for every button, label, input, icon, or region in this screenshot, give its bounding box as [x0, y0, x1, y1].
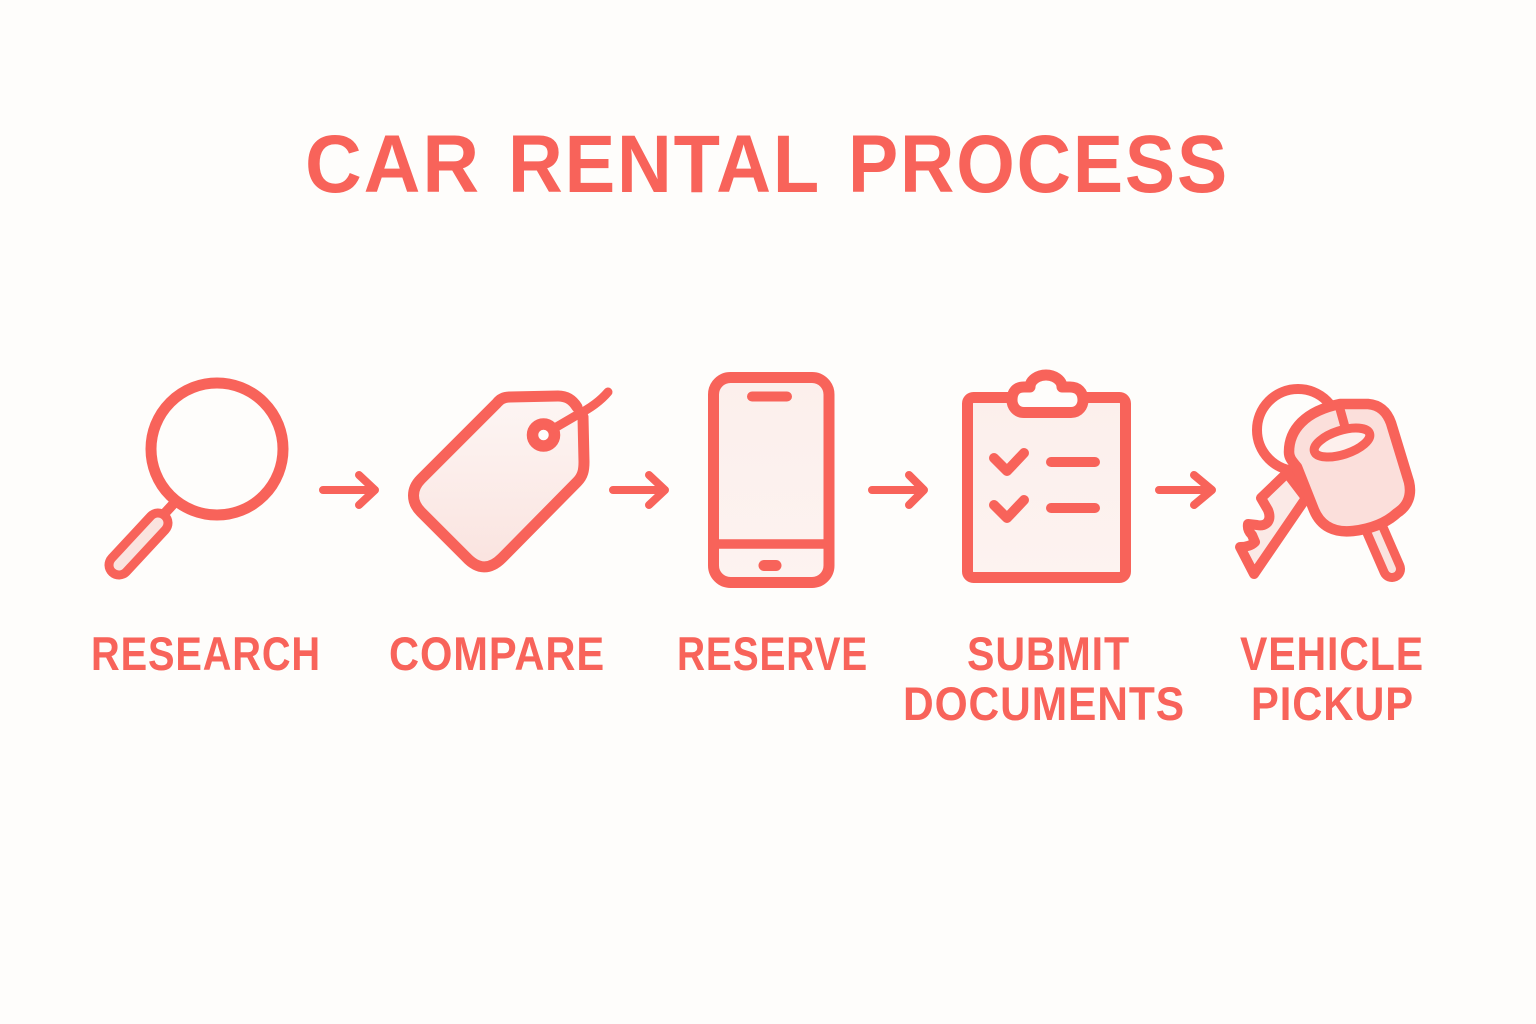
icon: car keys: [1240, 389, 1410, 574]
title: RENTAL: [508, 119, 821, 210]
step 2: compare: [389, 392, 608, 680]
label: submit documents: [903, 627, 1185, 730]
label: compare: COMPARE: [389, 627, 605, 680]
icon: magnifying glass: [119, 383, 283, 565]
step 5: vehicle pickup: [1240, 389, 1424, 730]
label: reserve: RESERVE: [677, 627, 868, 680]
step 1: research: [91, 383, 321, 680]
icon: clipboard checklist: [968, 375, 1126, 578]
label: vehicle pickup: [1240, 627, 1424, 730]
label: research: RESEARCH: [91, 627, 321, 680]
icon: smartphone: [714, 378, 829, 582]
step 4: submit documents: [903, 375, 1185, 730]
label: submit documents: DOCUMENTS: [903, 677, 1185, 730]
label: vehicle pickup: PICKUP: [1251, 677, 1414, 730]
arrow 4: [1159, 475, 1212, 505]
step 3: reserve: [677, 378, 868, 680]
arrow 1: [323, 475, 375, 505]
title: PROCESS: [848, 119, 1229, 210]
label: vehicle pickup: VEHICLE: [1240, 627, 1424, 680]
title: [305, 119, 1229, 210]
title: CAR: [305, 119, 481, 210]
icon: price tag: [414, 392, 608, 567]
label: submit documents: SUBMIT: [967, 627, 1130, 680]
arrow 2: [613, 475, 665, 505]
arrow 3: [872, 475, 924, 505]
